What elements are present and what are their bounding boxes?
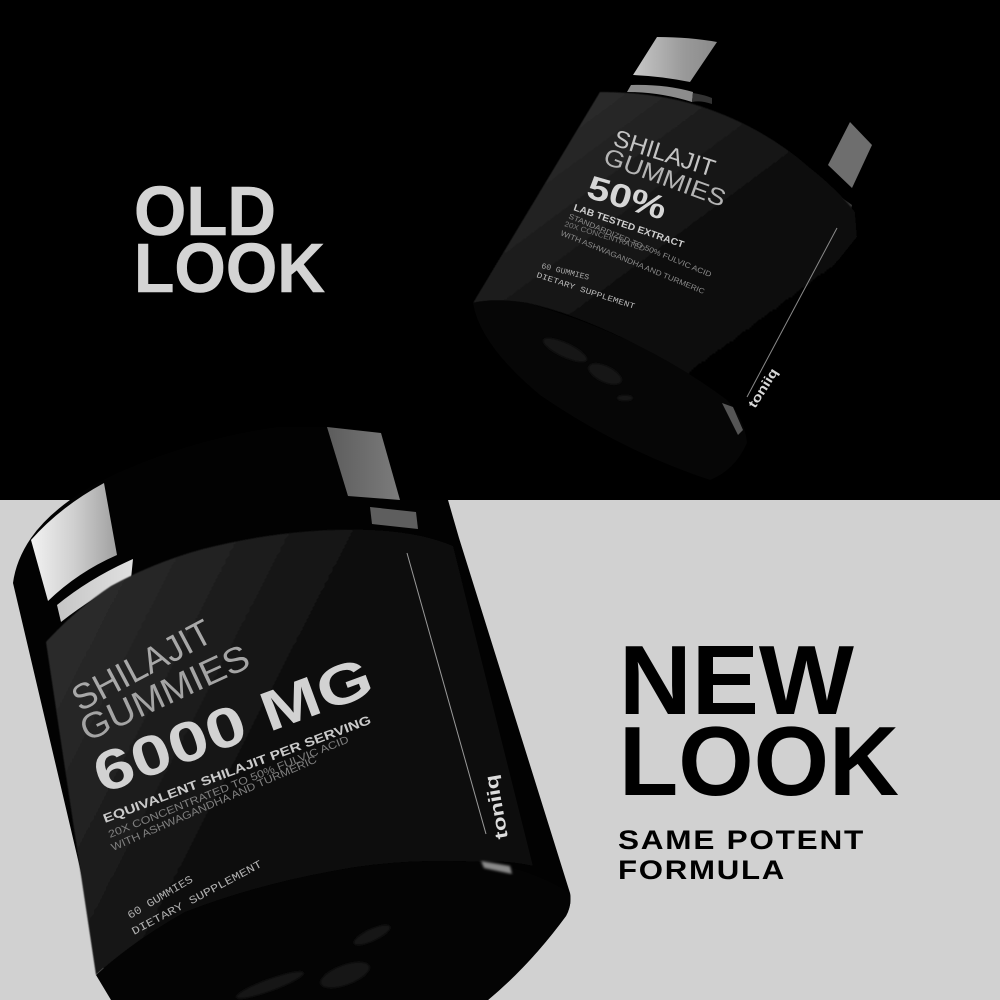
jar shoulder highlights: [627, 85, 852, 214]
jar label text: WITH ASHWAGANDHA AND TURMERIC: [559, 229, 707, 296]
jar base highlight: [722, 403, 743, 435]
jar label text: SHILAJIT: [610, 125, 719, 183]
jar label text: 50%: [583, 168, 671, 227]
jar label text: 20X CONCENTRATED: [563, 219, 647, 253]
jar brand name: toniiq: [745, 365, 781, 411]
jar label text: STANDARDIZED TO 50% FULVIC ACID: [567, 212, 713, 279]
jar lid highlight right: [828, 122, 872, 188]
jar label text: 60 GUMMIES: [126, 874, 196, 922]
jar label text: 60 GUMMIES: [540, 262, 590, 283]
subheading: same potent formula: SAME POTENT: [618, 825, 865, 855]
jar label text: GUMMIES: [73, 636, 256, 749]
jar label text: DIETARY SUPPLEMENT: [130, 859, 265, 939]
jar label text: EQUIVALENT SHILAJIT PER SERVING: [101, 713, 373, 826]
jar label text: [65, 611, 381, 939]
jar label text: 20X CONCENTRATED TO 50% FULVIC ACID: [107, 734, 351, 841]
jar label text: 6000 MG: [84, 645, 381, 805]
heading: new look: NEW: [619, 625, 855, 735]
jar base reflection: [234, 921, 393, 1000]
jar silhouette: [13, 427, 570, 1000]
jar label text: SHILAJIT: [65, 611, 219, 719]
jar divider line: [407, 553, 486, 834]
jar lid highlight left: [31, 483, 117, 601]
jar base highlight: [481, 861, 512, 874]
panel: black top background: [0, 0, 1000, 500]
subheading: same potent formula: [618, 825, 865, 885]
jar label band: [46, 530, 533, 975]
jar lid highlight right: [327, 427, 400, 500]
jar label text: LAB TESTED EXTRACT: [572, 202, 685, 251]
product: old look jar: [473, 37, 872, 480]
subheading: same potent formula: FORMULA: [618, 855, 786, 885]
jar base: [96, 861, 570, 1000]
heading: new look: LOOK: [619, 706, 899, 816]
heading: old look: [134, 172, 325, 307]
jar base reflection: [540, 334, 633, 401]
jar divider line: [747, 228, 837, 397]
jar base: [473, 300, 747, 480]
jar shoulder highlights: [57, 507, 418, 622]
jar label band: [473, 92, 857, 400]
jar label text: [535, 125, 729, 312]
product: new look jar: [13, 427, 570, 1000]
jar lid highlight left: [633, 37, 717, 82]
jar label text: DIETARY SUPPLEMENT: [535, 271, 636, 312]
panel: light grey bottom background: [0, 500, 1000, 1000]
jar brand name: toniiq: [481, 773, 512, 841]
heading: old look: LOOK: [134, 229, 325, 307]
heading: old look: OLD: [134, 172, 276, 250]
jar label text: WITH ASHWAGANDHA AND TURMERIC: [109, 754, 319, 854]
heading: new look: [619, 625, 899, 816]
jar label text: GUMMIES: [600, 143, 729, 213]
